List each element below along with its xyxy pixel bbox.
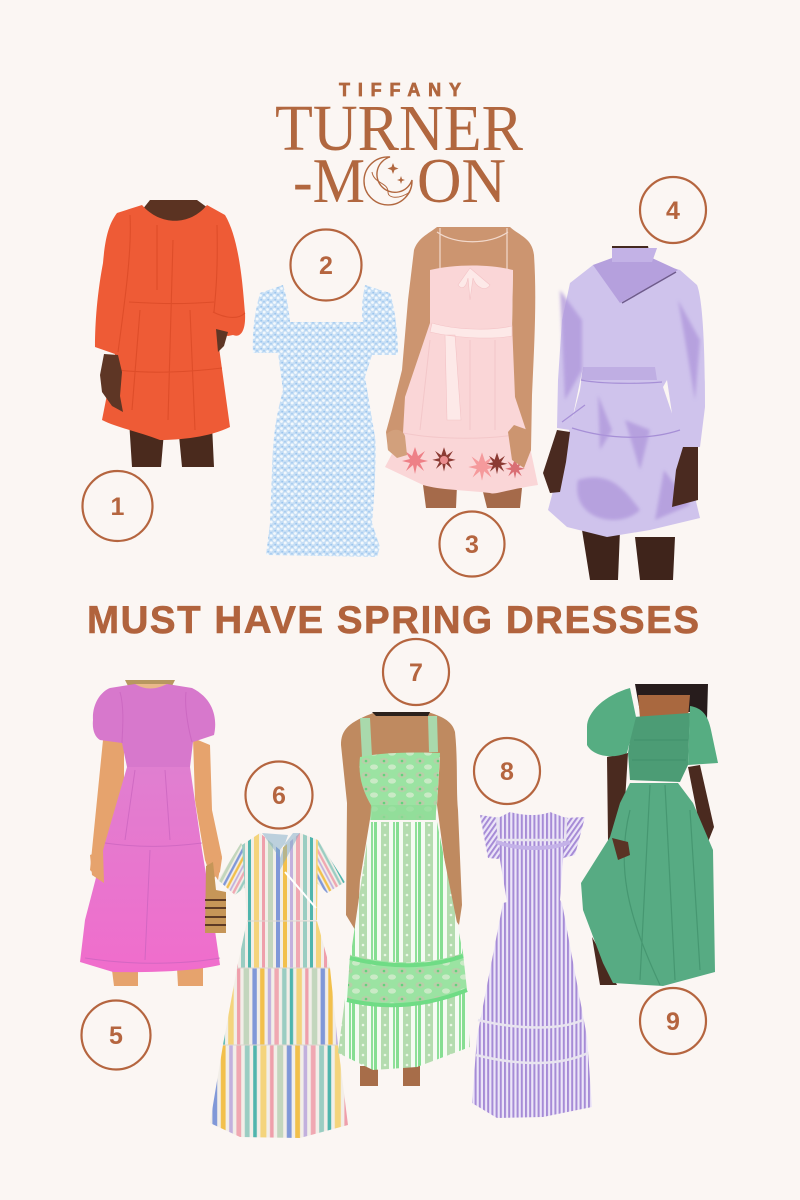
number badge 7 [383, 639, 449, 705]
dress 9: green puff sleeve dress [581, 684, 718, 986]
dress 5: pink smocked tiered midi dress [80, 680, 226, 986]
number badge 8: 8 [500, 758, 514, 786]
logo: Tiffany Turner-Moon [275, 80, 523, 216]
dress 2: blue floral smocked dress [253, 285, 398, 557]
number badge 1 [82, 471, 152, 541]
number badge 8 [474, 738, 540, 804]
dress 8: lilac stripe ruffle dress [472, 812, 592, 1118]
logo: Tiffany Turner-Moon: -M [293, 145, 365, 216]
number badge 2 [290, 230, 362, 300]
dress 7: green paisley sundress [338, 712, 470, 1086]
dress 3: pale pink belted dress [385, 227, 538, 508]
number badge 9 [640, 988, 706, 1054]
number badge 1: 1 [111, 493, 125, 521]
number badge 2: 2 [319, 252, 333, 280]
number badge 7: 7 [409, 659, 423, 687]
number badge 5: 5 [109, 1022, 123, 1050]
logo: Tiffany Turner-Moon: TURNER [275, 92, 523, 165]
number badge 3 [440, 512, 504, 576]
dress 4: lavender embroidered dress [543, 246, 705, 580]
number badge 9: 9 [666, 1008, 680, 1036]
heading: MUST HAVE SPRING DRESSES [87, 599, 699, 642]
number badge 5 [82, 1000, 150, 1070]
dress 1: orange tiered dress [95, 200, 245, 467]
number badge 4: 4 [666, 197, 680, 225]
number badge 3: 3 [465, 531, 479, 559]
number badge 6 [246, 762, 312, 828]
logo: Tiffany Turner-Moon: TIFFANY [339, 80, 461, 100]
logo: Tiffany Turner-Moon: ON [417, 145, 506, 216]
number badge 4 [640, 177, 706, 243]
number badge 6: 6 [272, 782, 286, 810]
dress 6: rainbow stripe wrap dress [210, 833, 348, 1138]
